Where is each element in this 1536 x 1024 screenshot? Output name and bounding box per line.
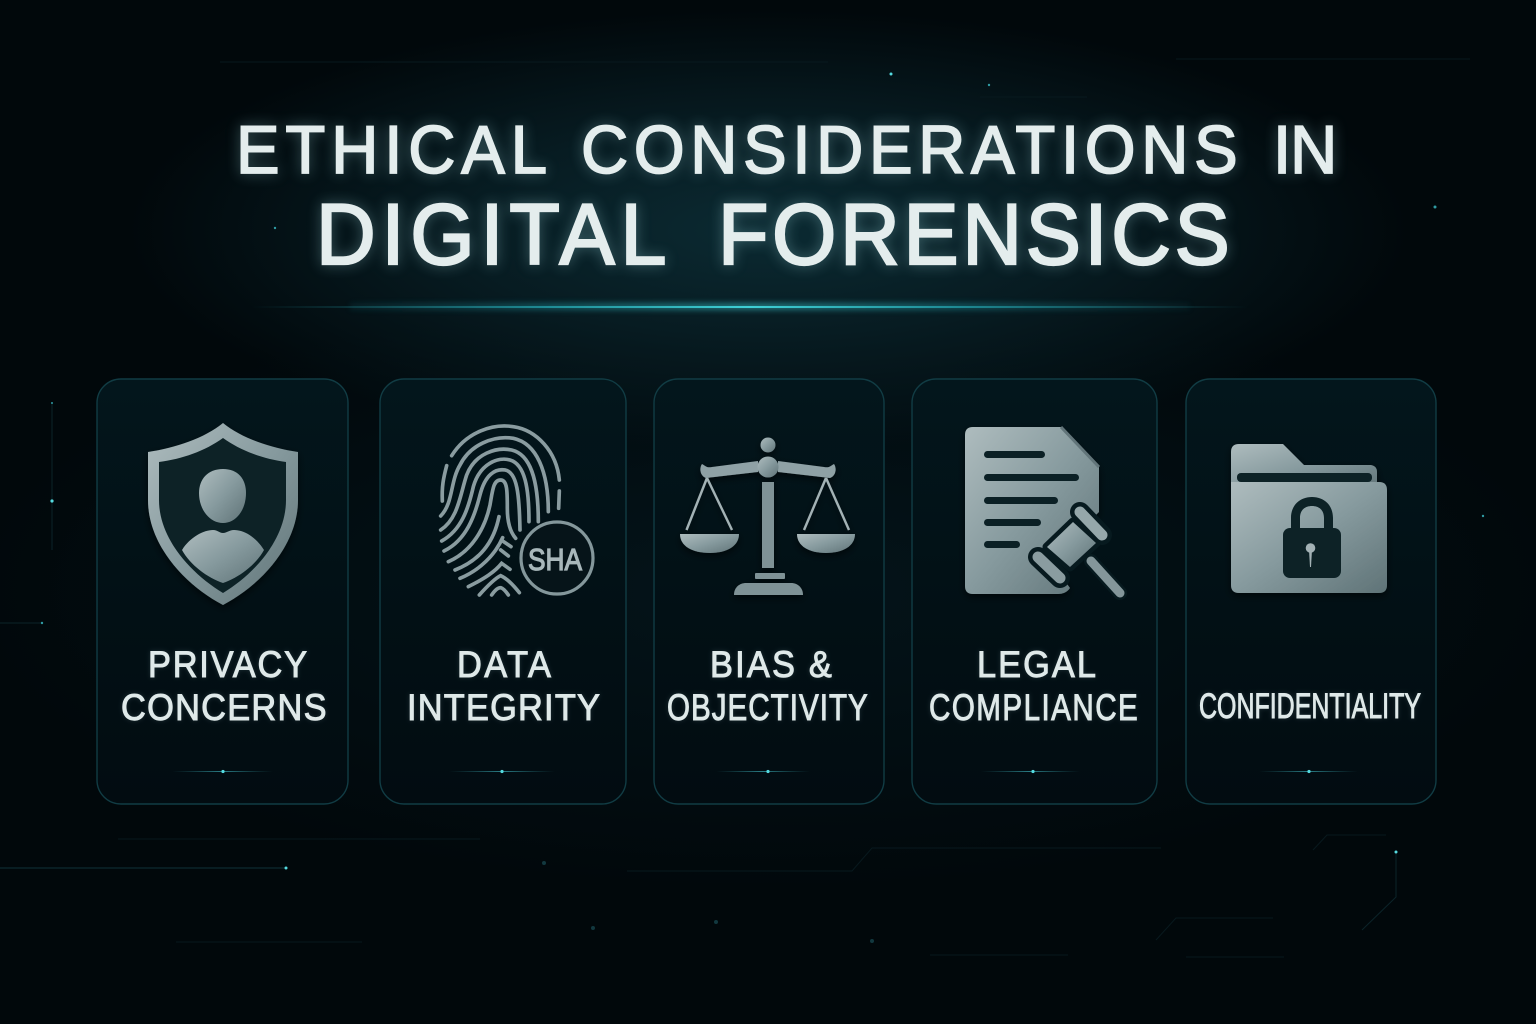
card background bbox=[1186, 379, 1436, 804]
card accent tick bbox=[449, 770, 555, 773]
panel: data integrity bbox=[380, 379, 626, 804]
label: LEGAL bbox=[977, 644, 1096, 685]
card accent tick bbox=[1259, 770, 1358, 773]
icon: balance scales bbox=[680, 438, 855, 595]
card background bbox=[380, 379, 626, 804]
label bbox=[407, 644, 600, 728]
title line 2 bbox=[316, 186, 1230, 282]
card accent tick bbox=[981, 770, 1080, 773]
card background bbox=[912, 379, 1157, 804]
label: COMPLIANCE bbox=[929, 688, 1138, 729]
card accent tick bbox=[716, 770, 810, 773]
label: INTEGRITY bbox=[407, 687, 600, 728]
icon: fingerprint with SHA badge: SHA bbox=[528, 542, 582, 577]
title line 1: IN bbox=[1273, 113, 1337, 188]
label: CONCERNS bbox=[121, 687, 327, 728]
panel: legal compliance bbox=[912, 379, 1157, 804]
title line 2: DIGITAL bbox=[316, 186, 666, 282]
label: DATA bbox=[457, 644, 551, 685]
card background bbox=[97, 379, 348, 804]
label bbox=[667, 644, 868, 729]
label bbox=[121, 644, 327, 728]
card accent tick bbox=[172, 770, 273, 773]
title line 1: CONSIDERATIONS bbox=[581, 113, 1238, 188]
title line 2: FORENSICS bbox=[718, 186, 1230, 282]
title line 1 bbox=[236, 113, 1337, 188]
label: OBJECTIVITY bbox=[667, 688, 868, 729]
icon: locked folder bbox=[1231, 444, 1387, 593]
panel: confidentiality bbox=[1186, 379, 1436, 804]
title bbox=[236, 113, 1337, 282]
panel: privacy concerns bbox=[97, 379, 348, 804]
title divider bbox=[250, 303, 1250, 310]
label: BIAS & bbox=[710, 644, 832, 685]
panel: bias and objectivity bbox=[654, 379, 884, 804]
label: PRIVACY bbox=[148, 644, 307, 685]
title line 1: ETHICAL bbox=[236, 113, 547, 188]
icon: fingerprint with SHA badge bbox=[441, 426, 593, 595]
icon: document with gavel bbox=[965, 427, 1120, 594]
card background bbox=[654, 379, 884, 804]
label: CONFIDENTIALITY bbox=[1199, 687, 1421, 726]
icon: shield with person bbox=[148, 423, 298, 605]
label bbox=[929, 644, 1138, 729]
